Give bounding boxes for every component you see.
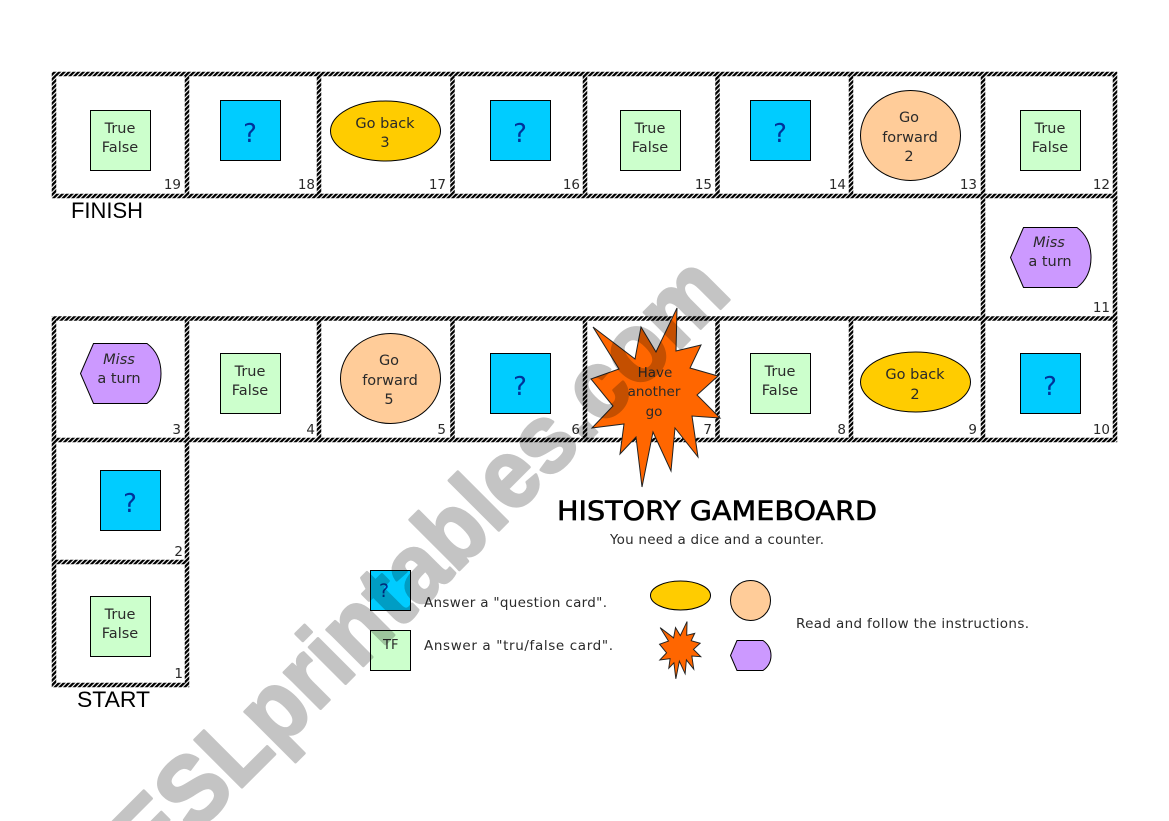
square 2: question xyxy=(100,470,160,530)
square 8: true false: True xyxy=(764,364,795,380)
square numbers: 17 xyxy=(429,177,446,193)
square numbers: 14 xyxy=(829,177,846,193)
legend: true false card: TF xyxy=(382,638,398,653)
square numbers: 10 xyxy=(1093,422,1110,438)
gameboard grid xyxy=(54,74,1115,685)
start label: START xyxy=(77,687,150,712)
legend: starburst xyxy=(660,622,701,679)
square 16: question xyxy=(490,100,550,160)
legend: oval xyxy=(650,581,710,610)
legend: true false card xyxy=(370,630,613,670)
square 17: go back 3: 3 xyxy=(380,135,390,151)
legend: true false card: Answer a "tru/false card". xyxy=(424,638,613,654)
square numbers: 12 xyxy=(1093,177,1110,193)
square numbers: 6 xyxy=(571,422,580,438)
square 13: go forward 2 xyxy=(860,90,960,180)
square numbers: 19 xyxy=(164,177,181,193)
square 5: go forward 5: forward xyxy=(362,373,418,389)
square 13: go forward 2: 2 xyxy=(904,149,914,165)
square 3: miss a turn: Miss xyxy=(103,352,135,368)
square numbers: 7 xyxy=(703,422,712,438)
square 19: true false: False xyxy=(102,140,138,156)
square numbers: 3 xyxy=(172,422,181,438)
square 17: go back 3: Go back xyxy=(355,116,415,132)
starburst: have another go xyxy=(591,308,720,487)
square numbers: 16 xyxy=(563,177,580,193)
square 9: go back 2: 2 xyxy=(910,387,920,403)
square 16: question: ? xyxy=(513,119,527,149)
subtitle: You need a dice and a counter. xyxy=(609,532,824,548)
title: HISTORY GAMEBOARD xyxy=(557,496,877,527)
square numbers xyxy=(164,177,1110,682)
legend: question card xyxy=(370,570,607,611)
square numbers: 2 xyxy=(174,544,183,560)
square 8: true false xyxy=(750,354,810,414)
square numbers: 8 xyxy=(837,422,846,438)
square numbers: 1 xyxy=(174,666,183,682)
square numbers: 15 xyxy=(695,177,712,193)
square 18: question: ? xyxy=(243,119,257,149)
square 12: true false xyxy=(1020,110,1080,170)
square 9: go back 2: Go back xyxy=(885,367,945,383)
square 8: true false: False xyxy=(762,383,798,399)
square 4: true false: False xyxy=(232,383,268,399)
square 14: question xyxy=(750,100,810,160)
square 4: true false: True xyxy=(234,364,265,380)
square 14: question: ? xyxy=(773,119,787,149)
square numbers: 13 xyxy=(960,177,977,193)
square 15: true false: False xyxy=(632,140,668,156)
square 17: go back 3 xyxy=(330,101,440,161)
square 9: go back 2 xyxy=(860,352,970,412)
square 3: miss a turn: a turn xyxy=(97,371,141,387)
square 5: go forward 5: Go xyxy=(379,353,399,369)
legend instruction: Read and follow the instructions. xyxy=(796,616,1029,632)
finish label: FINISH xyxy=(71,198,143,223)
square 15: true false xyxy=(620,110,680,170)
square 1: true false: True xyxy=(104,607,135,623)
square 1: true false: False xyxy=(102,626,138,642)
starburst: have another go: Have xyxy=(638,365,672,381)
square numbers: 5 xyxy=(437,422,446,438)
square 11: miss a turn xyxy=(1010,228,1091,288)
square 12: true false: False xyxy=(1032,140,1068,156)
square 12: true false: True xyxy=(1034,121,1065,137)
legend: question card: Answer a "question card". xyxy=(424,595,607,611)
starburst: have another go: go xyxy=(646,404,662,420)
square 6: question xyxy=(490,354,550,414)
square 10: question xyxy=(1020,354,1080,414)
square 11: miss a turn: Miss xyxy=(1033,235,1065,251)
square 2: question: ? xyxy=(123,489,137,519)
square 19: true false: True xyxy=(104,121,135,137)
square 1: true false xyxy=(90,596,150,656)
square 5: go forward 5: 5 xyxy=(384,392,394,408)
legend: question card: ? xyxy=(379,580,389,602)
square 4: true false xyxy=(220,354,280,414)
square 13: go forward 2: forward xyxy=(882,130,938,146)
square numbers: 18 xyxy=(298,177,315,193)
board squares xyxy=(80,90,1091,656)
square 15: true false: True xyxy=(634,121,665,137)
square 6: question: ? xyxy=(513,372,527,402)
square 18: question xyxy=(220,100,280,160)
square numbers: 11 xyxy=(1093,300,1110,316)
square numbers: 9 xyxy=(968,422,977,438)
square 5: go forward 5 xyxy=(340,334,440,424)
square 19: true false xyxy=(90,110,150,170)
starburst: have another go: another xyxy=(628,384,681,400)
square 10: question: ? xyxy=(1043,372,1057,402)
square 3: miss a turn xyxy=(80,344,161,404)
square numbers: 4 xyxy=(306,422,315,438)
square 11: miss a turn: a turn xyxy=(1028,254,1072,270)
legend: hexagon xyxy=(730,640,771,670)
legend: circle xyxy=(730,580,770,620)
square 13: go forward 2: Go xyxy=(899,110,919,126)
